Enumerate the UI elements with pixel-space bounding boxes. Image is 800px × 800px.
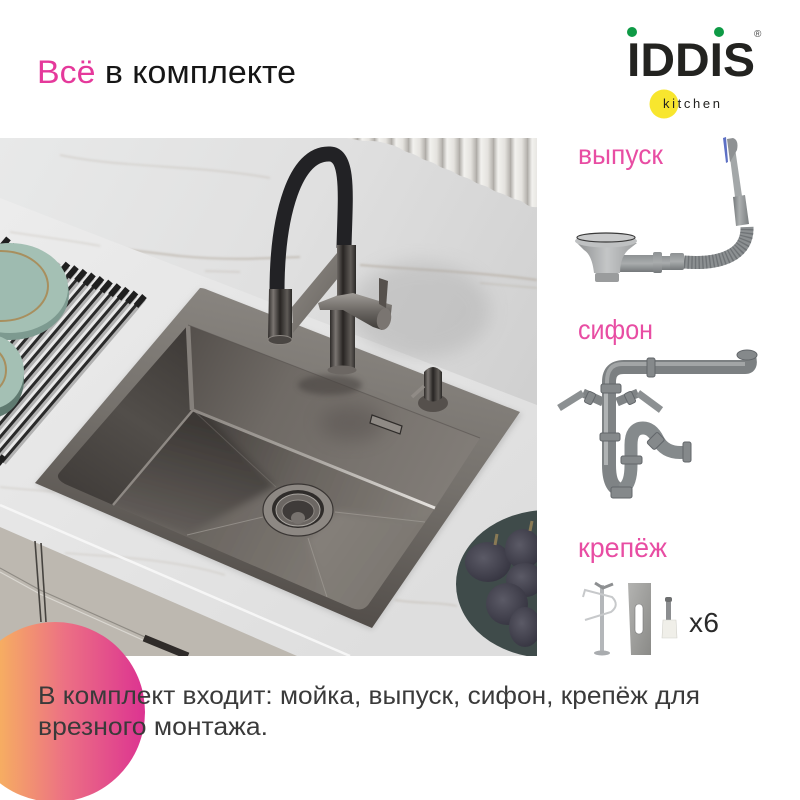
horizontal outlet pipe [618, 255, 655, 272]
sink rim [35, 288, 520, 628]
filter tap handle [379, 278, 388, 308]
lower plate stack [0, 375, 24, 416]
marble wall [0, 138, 537, 405]
sink bowl [58, 325, 480, 625]
cabinet handle [144, 638, 188, 656]
filter tap lever [318, 293, 392, 330]
bowl back wall [188, 325, 480, 508]
illustration: mounting clip [583, 583, 616, 656]
label: крепёж: крепёж [578, 532, 668, 563]
cabinet door gaps [0, 541, 145, 641]
siphon side connectors [583, 393, 603, 402]
overflow head [727, 138, 738, 162]
illustration: sink outlet with overflow [575, 137, 749, 282]
logo: IDDIS kitchen: IDDIS [627, 33, 755, 86]
green plates [0, 243, 69, 418]
illustration: mounting plate [628, 583, 651, 655]
fluted panel [347, 138, 537, 207]
faucet [268, 154, 448, 412]
rack bars [0, 240, 142, 462]
fruit plate with figs [456, 510, 537, 656]
logo: IDDIS kitchen: kitchen [663, 96, 720, 111]
strainer rim [575, 234, 637, 248]
main photo: sink on marble countertop [0, 138, 537, 656]
logo: IDDIS kitchen [627, 27, 762, 118]
overflow [320, 405, 402, 441]
upper plate gold rim [0, 251, 48, 321]
bowl highlight edges [193, 410, 435, 508]
corrugated hose [684, 227, 747, 263]
black hose [277, 154, 345, 292]
countertop [0, 198, 537, 656]
siphon vertical and U-trap [609, 388, 621, 490]
label: сифон: сифон [578, 314, 653, 345]
logo: IDDIS kitchen: ® [754, 29, 762, 40]
drain [263, 484, 333, 536]
cabinet front [0, 527, 297, 656]
drying rack [0, 238, 144, 464]
rack end caps [0, 238, 144, 464]
faucet wall shadow [350, 262, 490, 358]
strainer funnel [577, 243, 637, 273]
title: Всё в комплекте [37, 54, 296, 90]
gradient circle [0, 622, 145, 800]
upper plate stack [0, 284, 69, 340]
sink soft shadow [35, 290, 522, 630]
siphon top pipe and elbow [609, 357, 750, 388]
description text: врезного монтажа. [38, 713, 268, 741]
description text: В комплект входит: мойка, выпуск, сифон, крепёж для [38, 682, 700, 710]
faucet shadow on sink [298, 375, 362, 395]
overflow tube [728, 141, 742, 197]
faucet body [330, 245, 356, 374]
bowl floor panels [122, 412, 434, 610]
wall marble veins [0, 155, 537, 288]
label: выпуск: выпуск [578, 139, 664, 170]
overflow coupling [733, 195, 749, 226]
illustration: siphon [559, 350, 757, 498]
illustration: screw with plug [662, 597, 677, 638]
siphon couplings [584, 350, 757, 498]
counter veins [0, 232, 457, 606]
bowl left wall [58, 325, 193, 505]
soap dispenser [412, 367, 448, 412]
label: x6: x6 [689, 607, 719, 638]
countertop front edge highlight [0, 505, 350, 656]
spray arm [292, 253, 337, 332]
floor creases [187, 410, 425, 597]
pipe couplings [653, 252, 662, 273]
rack bar shadows [0, 242, 144, 464]
overflow blue seal [723, 137, 728, 163]
description text [38, 682, 700, 741]
spray head collar [268, 289, 292, 344]
